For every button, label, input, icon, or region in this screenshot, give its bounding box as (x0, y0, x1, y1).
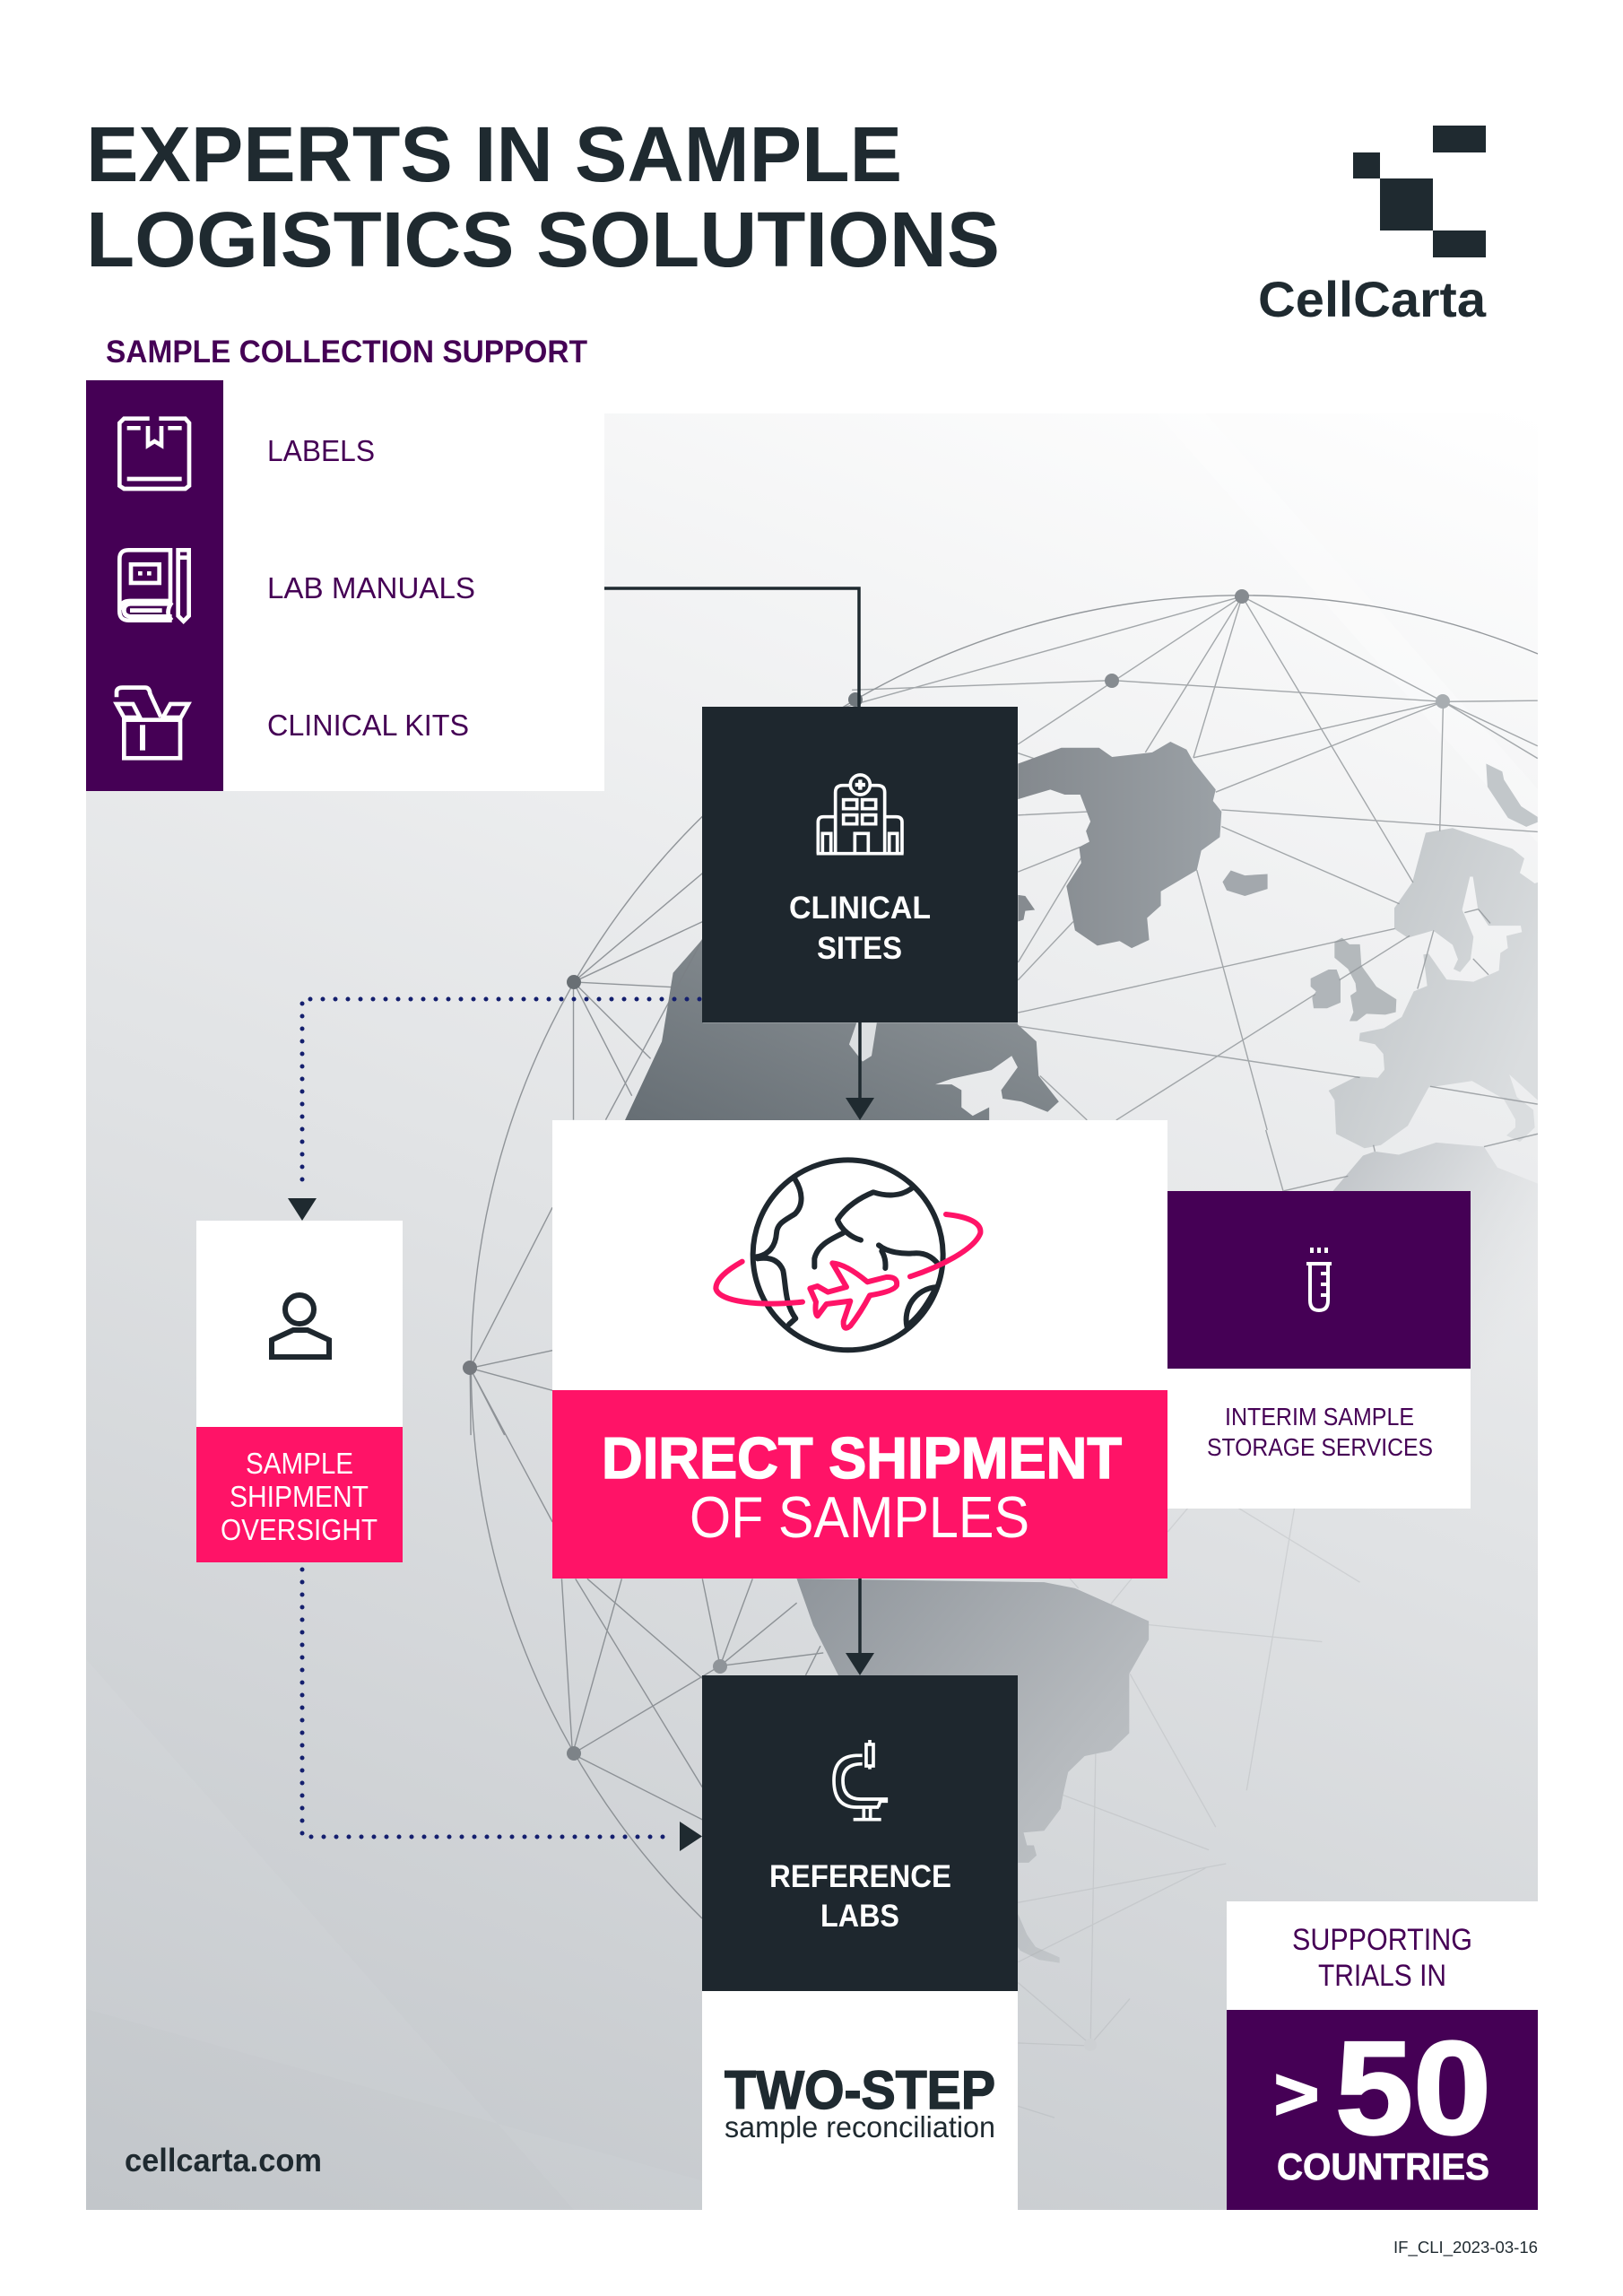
icon: lab manual (119, 550, 189, 622)
label: labels: LABELS (267, 434, 375, 467)
heading: sample collection support: SAMPLE COLLECTION SUPPORT (106, 335, 587, 370)
label: clinical sites: CLINICAL (789, 891, 931, 926)
label: sample shipment oversight: OVERSIGHT (221, 1513, 378, 1546)
panel: sample shipment oversight (196, 1221, 403, 1562)
number: more than 50 (1274, 2014, 1491, 2162)
network nodes (463, 589, 1450, 2051)
label: sample shipment oversight (221, 1447, 378, 1546)
panel: sample collection support (86, 380, 604, 791)
arrow: dotted clinical sites to oversight (288, 999, 699, 1221)
label: direct shipment: DIRECT SHIPMENT (602, 1425, 1122, 1491)
title: EXPERTS IN SAMPLE (86, 111, 902, 198)
label: of samples: OF SAMPLES (690, 1484, 1029, 1550)
faded south-eastern lines (1018, 1507, 1360, 2118)
panel: two-step sample reconciliation: TWO-STEP (725, 2060, 995, 2120)
label: interim sample storage services: INTERIM SAMPLE (1225, 1403, 1414, 1431)
label: sample shipment oversight: SHIPMENT (230, 1480, 369, 1513)
background panel (86, 413, 1538, 2210)
icon: hospital (817, 775, 904, 854)
arrow: direct shipment to reference labs (846, 1578, 874, 1675)
label: supporting trials in: TRIALS IN (1318, 1959, 1446, 1993)
number: more than 50: 50 (1335, 2014, 1491, 2162)
label: sample shipment oversight: SAMPLE (246, 1447, 353, 1480)
label: countries: COUNTRIES (1277, 2145, 1489, 2187)
arrow: dotted oversight to reference labs (302, 1570, 702, 1851)
label: interim sample storage services: STORAGE SERVICES (1207, 1433, 1433, 1461)
arrow: clinical sites to direct shipment (846, 1022, 874, 1120)
website: cellcarta.com (125, 2142, 322, 2179)
panel: reference labs (702, 1675, 1018, 1991)
CellCarta logo: CellCarta (1258, 271, 1487, 327)
outer globe arc (471, 596, 1538, 1918)
label: reference labs: LABS (820, 1899, 899, 1934)
icon: test tube (1306, 1248, 1332, 1310)
number: more than 50: > (1274, 2054, 1319, 2134)
southern network lines (561, 1578, 823, 1820)
title: LOGISTICS SOLUTIONS (86, 196, 1000, 283)
panel: two-step sample reconciliation (702, 1991, 1018, 2210)
globe network map (463, 589, 1538, 2118)
panel: direct shipment of samples (552, 1120, 1167, 1578)
label: clinical kits: CLINICAL KITS (267, 709, 469, 742)
western network lines (470, 873, 703, 1522)
icon: labels box (119, 419, 189, 489)
label: supporting trials in (1292, 1923, 1472, 1993)
label: lab manuals: LAB MANUALS (267, 571, 475, 604)
label: reference labs (769, 1859, 951, 1934)
CellCarta logo (1258, 126, 1487, 327)
panel: supporting trials statistic (1227, 1901, 1538, 2210)
icon: globe with plane (716, 1160, 980, 1350)
northern network lines (845, 596, 1538, 1130)
panel: two-step sample reconciliation: sample reconciliation (725, 2110, 995, 2144)
panel: interim sample storage services (1167, 1191, 1471, 1509)
icon: microscope (834, 1740, 886, 1820)
arrow: support to clinical sites (604, 588, 859, 707)
label: clinical sites (789, 891, 931, 966)
footer code: IF_CLI_2023-03-16 (1393, 2239, 1538, 2257)
label: reference labs: REFERENCE (769, 1859, 951, 1894)
panel: clinical sites (702, 707, 1018, 1022)
label: supporting trials in: SUPPORTING (1292, 1923, 1472, 1957)
interim panel top lines (1266, 1130, 1538, 1191)
icon: clinical kit (117, 688, 188, 758)
title (86, 111, 1000, 283)
icon: person (272, 1295, 329, 1357)
label: clinical sites: SITES (817, 931, 902, 966)
continents (624, 742, 1538, 1963)
label: interim sample storage services (1207, 1403, 1433, 1461)
